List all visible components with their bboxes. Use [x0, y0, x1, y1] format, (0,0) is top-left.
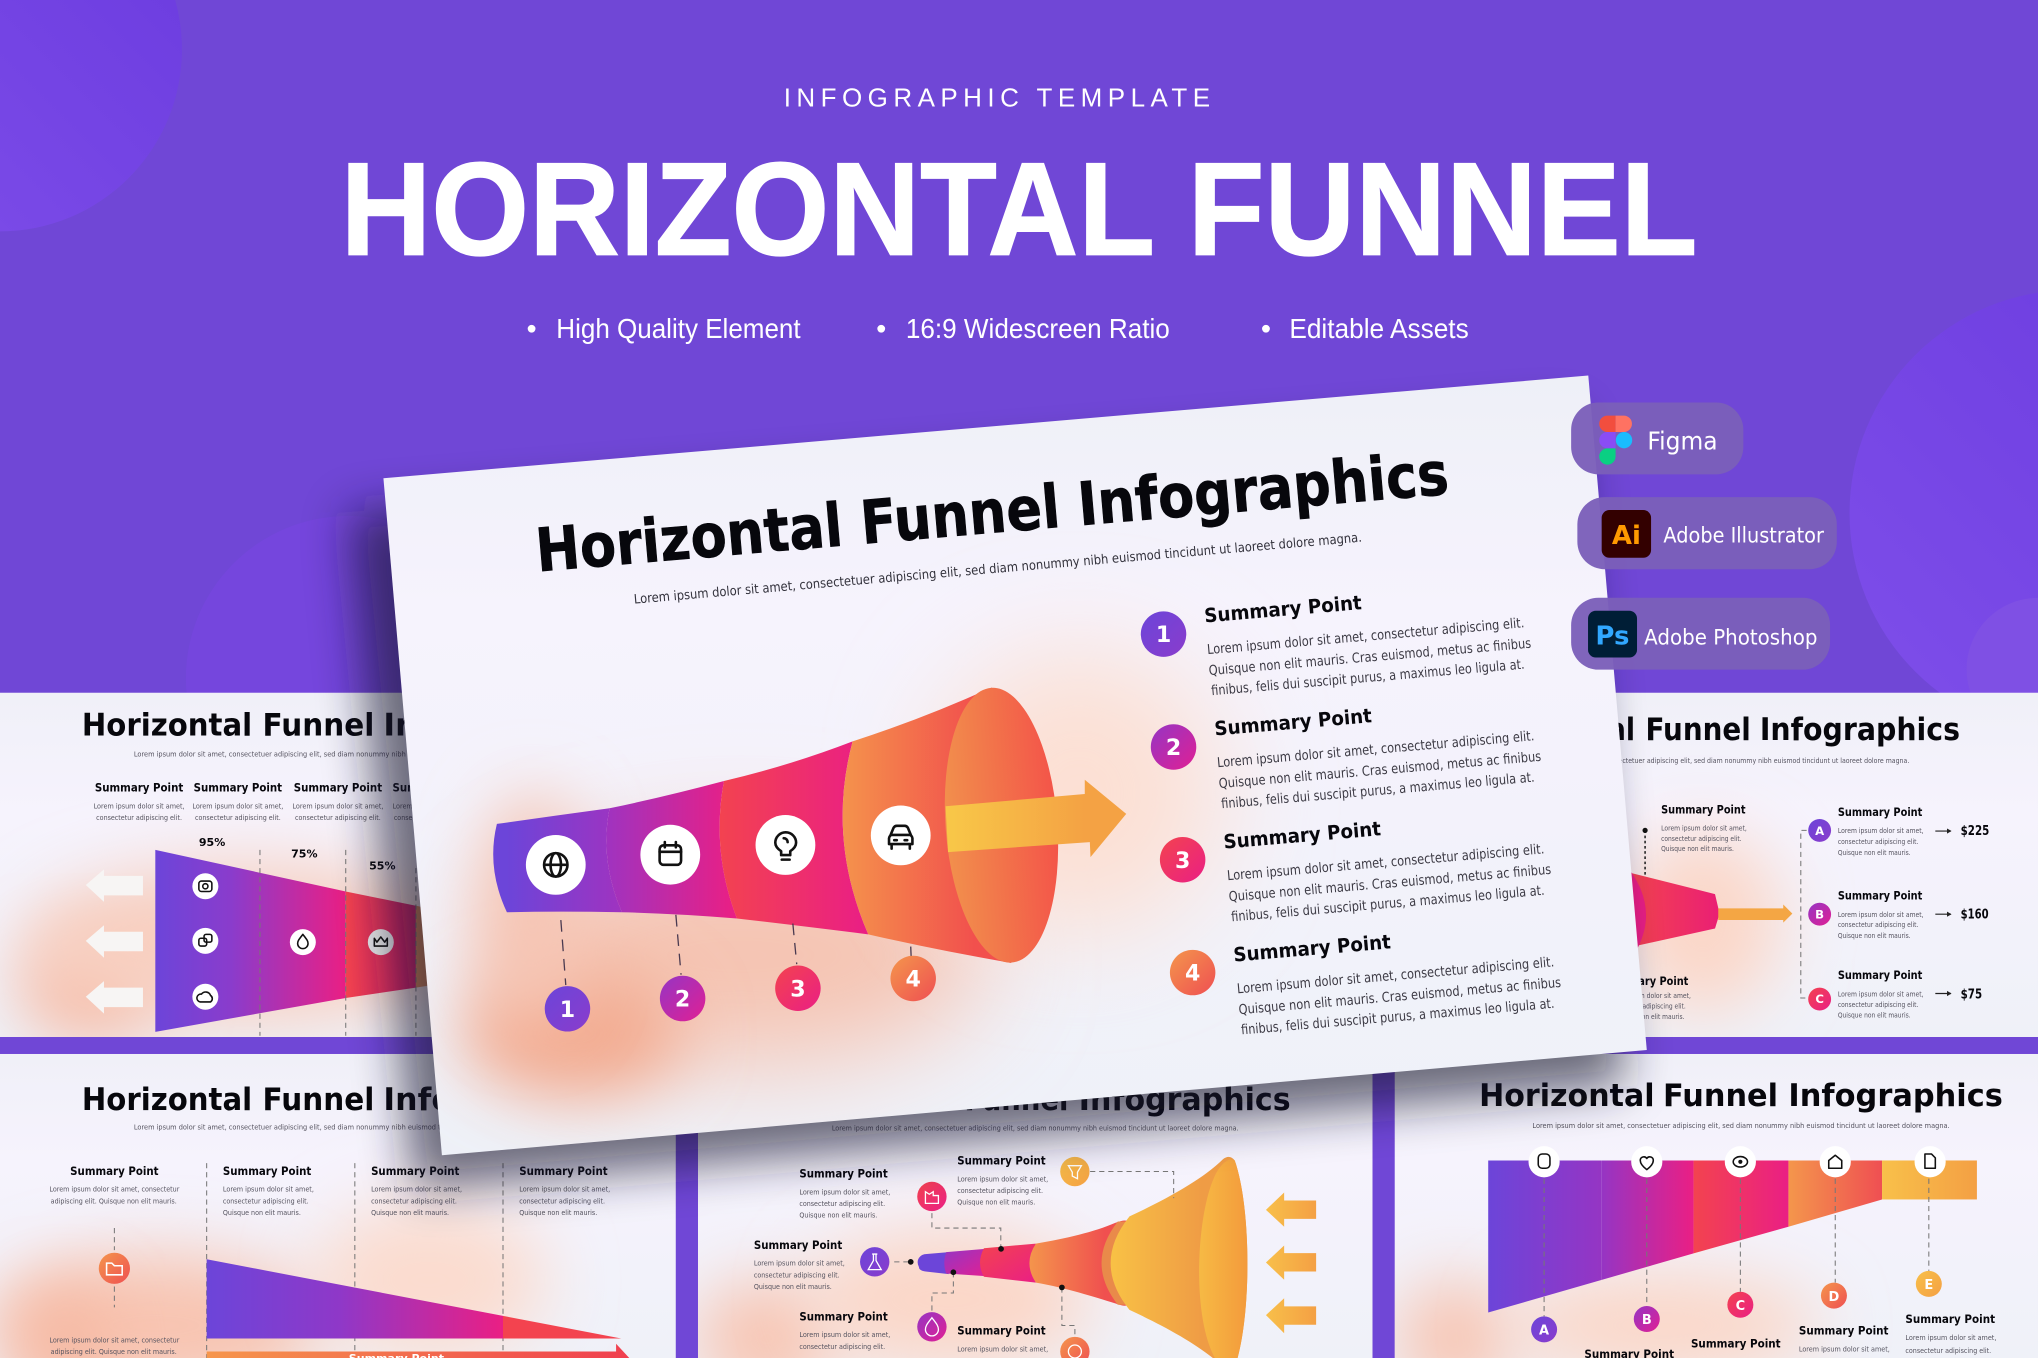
heading: Funnel [263, 708, 374, 744]
icon: globe [526, 835, 586, 895]
drop lines [1544, 1170, 1929, 1316]
heading: Funnel [1645, 712, 1751, 748]
numbered badges under funnel: 2 [675, 987, 690, 1013]
icon: figma logo [1599, 416, 1632, 465]
summary item 4: finibus, felis dui suscipit purus, a maximus leo ligula at. [1240, 996, 1555, 1038]
labels: Lorem ipsum dolor sit amet, [957, 1174, 1048, 1183]
segment 4 [843, 687, 1011, 963]
labels: Lorem ipsum dolor sit amet, [957, 1345, 1048, 1354]
column labels: consectetur adipiscing elit. [295, 813, 381, 822]
list items A B C: Summary Point [1838, 969, 1923, 982]
percent labels [199, 838, 396, 870]
heading: Infographics [1760, 712, 1960, 748]
list items A B C: Lorem ipsum dolor sit amet, [1838, 827, 1924, 835]
labels: consectetur adipiscing elit. [957, 1186, 1043, 1195]
summary item 3: finibus, felis dui suscipit purus, a maximus leo ligula at. [1231, 883, 1545, 925]
heading [1479, 1078, 2003, 1114]
heading: Funnel [263, 1082, 374, 1118]
column text: consectetur adipiscing elit. [223, 1196, 309, 1205]
list items A B C: Lorem ipsum dolor sit amet, [1838, 991, 1924, 999]
labels top: consectetur adipiscing elit. [1661, 835, 1742, 843]
icon: car [871, 805, 931, 865]
icon: Ai logo: Ai [1612, 521, 1641, 551]
heading [767, 1082, 1291, 1118]
column text: Summary Point [371, 1164, 460, 1178]
column text: Quisque non elit mauris. [519, 1208, 597, 1217]
heading [84, 1086, 438, 1110]
summary item 4: Quisque non elit mauris. Cras euismod, metus ac finibus [1238, 975, 1562, 1018]
feature list: Editable Assets [1289, 313, 1469, 344]
lower text [50, 1337, 180, 1356]
column labels: consectetur adipiscing elit. [96, 813, 182, 822]
summary item 3 [1160, 817, 1552, 925]
list items A B C: Summary Point [1838, 889, 1923, 902]
labels [1584, 1312, 1996, 1358]
funnel icons [526, 805, 931, 895]
numbered badges under funnel: 1 [560, 997, 575, 1023]
panel: preview slide top left [0, 692, 432, 1037]
connector dashes [561, 915, 911, 985]
header [341, 83, 1697, 344]
labels top [1640, 804, 1746, 1019]
heading: Funnel [964, 1082, 1068, 1118]
summary item 2: Quisque non elit mauris. Cras euismod, metus ac finibus [1218, 749, 1542, 792]
badge: Adobe Illustrator: Adobe Illustrator [1663, 524, 1824, 549]
column text [49, 1164, 610, 1217]
decorative circle top left [0, 0, 182, 231]
panel: preview slide top left: Lorem ipsum dolor sit amet, consectetuer adipiscing elit, sed diam nonummy nibh euismod tincidunt ut laoreet dolore magna. [134, 749, 551, 758]
column text: Summary Point [223, 1164, 312, 1178]
badge: Adobe Photoshop: Adobe Photoshop [1644, 626, 1817, 651]
lower text: adipiscing elit. Quisque non elit mauris. [51, 1347, 177, 1356]
price arrows and values: $225 [1961, 823, 1989, 839]
heading: Infographics [1788, 1078, 2003, 1114]
segment 1 [493, 808, 622, 912]
summary item 2: Summary Point [1213, 704, 1373, 741]
summary item 1 [1141, 591, 1532, 699]
funnel mouth [935, 684, 1068, 967]
column text: Quisque non elit mauris. [223, 1208, 301, 1217]
column labels: Summary Point [95, 780, 184, 794]
heading [1618, 716, 1959, 746]
heading: Funnel [1663, 1078, 1778, 1114]
list items A B C: consectetur adipiscing elit. [1838, 921, 1918, 929]
numbered badges under funnel [545, 956, 936, 1032]
icon: Ai logo [1602, 510, 1651, 558]
list items A B C: consectetur adipiscing elit. [1838, 1001, 1918, 1009]
labels: Lorem ipsum dolor sit amet, [754, 1259, 845, 1268]
percent labels: 55% [369, 859, 396, 872]
summary item 3: Summary Point [1223, 817, 1382, 854]
badge: Adobe Illustrator [1577, 497, 1837, 569]
panel: preview slide top right: Lorem ipsum dolor sit amet, consectetuer adipiscing elit, sed diam nonummy nibh euismod tincidunt ut laoreet dolore magna. [1514, 756, 1909, 765]
labels top: consectetur adipiscing elit. [1605, 1002, 1686, 1010]
peach glow [461, 650, 1222, 1098]
column text: Summary Point [70, 1164, 159, 1178]
decorative circle right [1850, 290, 2038, 737]
letter badges: B [1642, 1313, 1652, 1328]
list items A B C: Quisque non elit mauris. [1838, 932, 1911, 940]
connectors [894, 1172, 1174, 1340]
icon: calendar [640, 825, 700, 885]
feature list: High Quality Element [556, 313, 801, 344]
stepped funnel [1488, 1160, 1977, 1313]
panel: preview slide top right [1616, 692, 2038, 1037]
main card shadow [348, 416, 1625, 1189]
labels top: Quisque non elit mauris. [1612, 1013, 1684, 1021]
list items A B C: Summary Point [1838, 806, 1923, 819]
panel: preview slide bottom left [0, 1054, 676, 1358]
price arrows and values: $160 [1961, 907, 1989, 923]
panel: preview slide bottom middle [695, 1054, 1373, 1358]
letter badges: E [1924, 1278, 1933, 1293]
segment 3 [720, 741, 868, 934]
summary item 4: Summary Point [1232, 930, 1392, 967]
bottom arrow [207, 1344, 632, 1358]
labels: Lorem ipsum dolor sit amet, [1905, 1333, 1996, 1342]
summary item 4 [1170, 930, 1562, 1038]
heading: Horizontal [767, 1082, 936, 1118]
column labels: Summary Point [194, 780, 282, 794]
labels: Quisque non elit mauris. [754, 1282, 832, 1291]
column labels: Lorem ipsum dolor sit amet, [192, 801, 283, 810]
labels: Quisque non elit mauris. [957, 1198, 1035, 1207]
column labels: Lorem ipsum dolor sit amet, [292, 801, 383, 810]
labels top: Lorem ipsum dolor sit amet, [1661, 824, 1747, 832]
labels [754, 1153, 1048, 1354]
labels: Summary Point [957, 1153, 1046, 1167]
summary item 2: 2 [1166, 735, 1181, 761]
badge: Figma: Figma [1647, 426, 1718, 455]
list items A B C [1808, 806, 1924, 1020]
labels top: Summary Point [1604, 975, 1689, 988]
panel: preview slide bottom middle: Lorem ipsum dolor sit amet, consectetuer adipiscing elit, sed diam nonummy nibh euismod tincidunt ut laoreet dolore magna. [832, 1124, 1239, 1133]
output arrow [946, 780, 1126, 857]
price arrows and values [1935, 823, 1989, 1003]
letter badges: A [1539, 1324, 1549, 1339]
heading: Horizontal [1479, 1078, 1655, 1114]
heading [84, 712, 405, 736]
labels top: Quisque non elit mauris. [1661, 845, 1734, 853]
top icons [1528, 1146, 1946, 1177]
labels: Summary Point [799, 1166, 888, 1180]
icon: light bulb [756, 815, 815, 875]
summary item 1: Summary Point [1203, 591, 1363, 627]
summary item 1: Lorem ipsum dolor sit amet, consectetur adipiscing elit. [1206, 615, 1525, 658]
badge: Figma [1571, 402, 1743, 474]
panel: preview slide bottom right [1395, 1054, 2038, 1358]
left arrows [86, 869, 143, 1014]
icon: Ps logo: Ps [1595, 622, 1629, 652]
badge: Adobe Photoshop [1571, 598, 1830, 670]
summary item 4: Lorem ipsum dolor sit amet, consectetur adipiscing elit. [1236, 954, 1555, 997]
segment 2 [606, 781, 737, 919]
labels top: Summary Point [1661, 804, 1746, 817]
list items A B C: Quisque non elit mauris. [1838, 1012, 1911, 1020]
panel: preview slide bottom left: Lorem ipsum dolor sit amet, consectetuer adipiscing elit, sed diam nonummy nibh euismod tincidunt ut laoreet dolore magna. [134, 1122, 551, 1131]
labels: consectetur adipiscing elit. [799, 1199, 885, 1208]
summary item 1: finibus, felis dui suscipit purus, a maximus leo ligula at. [1211, 657, 1525, 699]
main slide title: Horizontal Funnel Infographics [533, 439, 1451, 586]
percent labels: 95% [199, 836, 225, 849]
summary item 3: Lorem ipsum dolor sit amet, consectetur adipiscing elit. [1226, 841, 1545, 884]
column text: Summary Point [519, 1164, 608, 1178]
column labels: consectetur adipiscing elit. [195, 813, 281, 822]
column labels: Summary Point [294, 780, 382, 794]
column labels [94, 782, 413, 822]
labels: Lorem ipsum dolor sit amet, [799, 1187, 890, 1196]
list items A B C: B [1815, 908, 1824, 922]
summary item 3: 3 [1175, 848, 1190, 874]
letter badges: D [1829, 1290, 1840, 1305]
column text: consectetur adipiscing elit. [519, 1196, 605, 1205]
output arrow [1718, 904, 1792, 923]
column text: Lorem ipsum dolor sit amet, consectetur [49, 1185, 179, 1194]
numbered badges under funnel: 3 [790, 976, 806, 1002]
funnel [1631, 828, 1718, 948]
labels: Summary Point [754, 1238, 843, 1252]
labels: Lorem ipsum dolor sit amet, [1799, 1345, 1890, 1354]
left arrows [1266, 1192, 1316, 1333]
column labels: consectetur adipiscing elit. [394, 813, 480, 822]
letter badges: C [1736, 1299, 1745, 1314]
list items A B C: A [1815, 824, 1824, 838]
main slide subtitle: Lorem ipsum dolor sit amet, consectetuer adipiscing elit, sed diam nonummy nibh euismod tincidunt ut laoreet dolore magna. [633, 531, 1362, 608]
summary item 3: Quisque non elit mauris. Cras euismod, metus ac finibus [1228, 862, 1552, 905]
labels: Summary Point [1905, 1312, 1995, 1326]
heading: Infographics [383, 1082, 606, 1118]
list items A B C: Lorem ipsum dolor sit amet, [1838, 911, 1924, 919]
heading: Horizontal [82, 708, 252, 744]
labels: Summary Point [799, 1309, 888, 1323]
labels: consectetur adipiscing elit. [799, 1342, 885, 1351]
heading: Infographics [1079, 1082, 1291, 1118]
summary item 2: Lorem ipsum dolor sit amet, consectetur adipiscing elit. [1216, 728, 1535, 771]
labels: Quisque non elit mauris. [799, 1211, 877, 1220]
labels: Summary Point [957, 1324, 1046, 1338]
column text: Lorem ipsum dolor sit amet, [223, 1185, 314, 1194]
subtitle: INFOGRAPHIC TEMPLATE [784, 83, 1210, 113]
heading: Horizontal [82, 1082, 252, 1118]
funnel [918, 1157, 1247, 1358]
percent labels: 75% [291, 848, 318, 861]
price arrows and values: $75 [1961, 987, 1982, 1003]
decorative circle lower left [186, 516, 511, 841]
list items A B C: consectetur adipiscing elit. [1838, 838, 1918, 846]
summary item 2 [1151, 704, 1542, 812]
numbered badges under funnel: 4 [906, 967, 921, 993]
funnel [155, 850, 448, 1036]
panel: main slide [383, 376, 1647, 1155]
labels top: Lorem ipsum dolor sit amet, [1605, 992, 1691, 1000]
lower text: Lorem ipsum dolor sit amet, consectetur [49, 1335, 179, 1344]
summary item 1: Quisque non elit mauris. Cras euismod, metus ac finibus [1208, 636, 1532, 679]
labels: consectetur adipiscing elit. [1905, 1346, 1991, 1355]
column labels: Lorem ipsum dolor sit amet, [393, 801, 484, 810]
summary item 2: finibus, felis dui suscipit purus, a maximus leo ligula at. [1221, 770, 1535, 812]
folder icon [99, 1253, 130, 1284]
column labels: Summary Point [393, 780, 481, 794]
summary item 4: 4 [1185, 961, 1200, 987]
feature list [528, 313, 1469, 344]
letter badges [1531, 1271, 1942, 1342]
main title: HORIZONTAL FUNNEL [341, 136, 1697, 284]
labels: Lorem ipsum dolor sit amet, [799, 1330, 890, 1339]
icon circles [860, 1157, 1090, 1358]
panel: preview slide bottom right: Lorem ipsum dolor sit amet, consectetuer adipiscing elit, sed diam nonummy nibh euismod tincidunt ut laoreet dolore magna. [1532, 1121, 1950, 1130]
heading: Infographics [383, 708, 606, 744]
column text: adipiscing elit. Quisque non elit mauris. [51, 1196, 177, 1205]
column text: Quisque non elit mauris. [371, 1208, 449, 1217]
column text: consectetur adipiscing elit. [371, 1196, 457, 1205]
funnel icons [192, 873, 394, 1010]
column text: Lorem ipsum dolor sit amet, [371, 1185, 462, 1194]
icon: Ps logo [1588, 611, 1637, 658]
list items A B C: Quisque non elit mauris. [1838, 849, 1911, 857]
labels: consectetur adipiscing elit. [754, 1270, 840, 1279]
wedge chart [207, 1259, 621, 1339]
decorative circle small right [1967, 598, 2038, 741]
main funnel [493, 684, 1126, 967]
column labels: Lorem ipsum dolor sit amet, [94, 801, 185, 810]
feature list: 16:9 Widescreen Ratio [906, 313, 1170, 344]
column text: Lorem ipsum dolor sit amet, [519, 1185, 610, 1194]
list items A B C: C [1815, 992, 1824, 1006]
summary item 1: 1 [1156, 622, 1171, 648]
heading: Horizontal [1479, 712, 1635, 748]
labels: Summary Point [1691, 1337, 1781, 1351]
labels: Summary Point [1799, 1324, 1889, 1338]
